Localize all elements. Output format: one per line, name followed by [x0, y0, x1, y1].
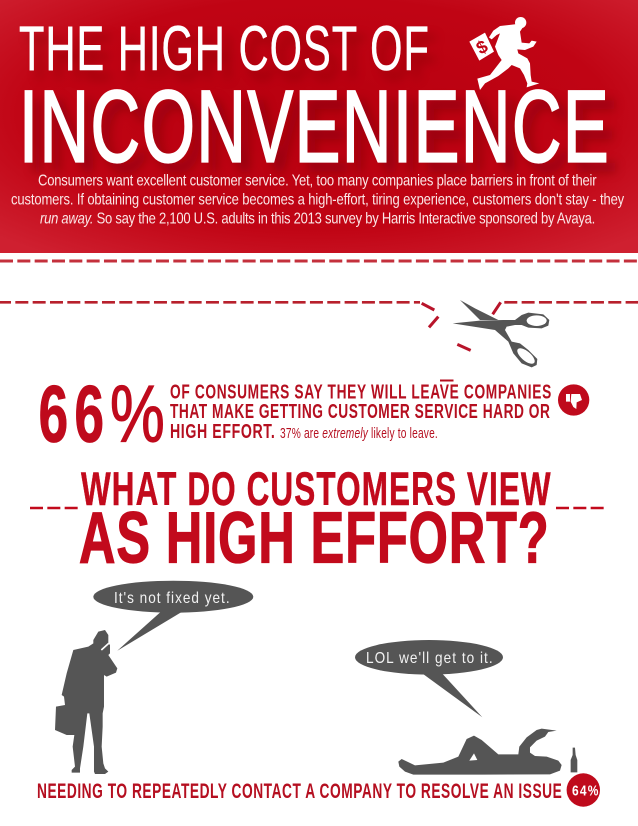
- title: inconvenience: INCONVENIENCE: [19, 70, 609, 184]
- badge: 64 percent: [567, 773, 600, 807]
- title shadow: [27, 24, 618, 193]
- callout: lol we'll get to it: [355, 640, 503, 717]
- stat: 66 percent: [38, 368, 165, 460]
- title shadow: THE HIGH COST OF: [27, 24, 437, 93]
- text block: intro: run away. So say the 2,100 U.S. adults in this 2013 survey by Harris Interactive sponsored by Avaya.: [40, 211, 595, 228]
- callout: it's not fixed yet: It's not fixed yet.: [114, 590, 230, 607]
- callout: lol we'll get to it: LOL we'll get to it.: [366, 650, 493, 667]
- heading: what do customers view as high effort: [79, 464, 551, 579]
- badge: 64 percent: 64%: [572, 782, 598, 799]
- text block: intro: [11, 173, 625, 228]
- caption: repeatedly contact: NEEDING TO REPEATEDLY CONTACT A COMPANY TO RESOLVE AN ISSUE: [37, 779, 562, 803]
- title: the high cost of: THE HIGH COST OF: [19, 15, 429, 84]
- text block: leave companies: OF CONSUMERS SAY THEY WILL LEAVE COMPANIES: [170, 380, 551, 403]
- icon: bottle: [571, 748, 577, 772]
- text block: leave companies: 37% are extremely likely to leave.: [280, 424, 438, 442]
- icon: running man with money case: $: [473, 36, 491, 58]
- icon: thumbs down badge: [558, 384, 589, 416]
- icon: running man with money case: [469, 17, 539, 90]
- icon: scissors cutting dashed line: [422, 300, 549, 367]
- text block: intro: Consumers want excellent customer service. Yet, too many companies place barriers in front of their: [38, 173, 597, 190]
- text block: leave companies: HIGH EFFORT.: [170, 419, 275, 443]
- icon: man lying down with phone: [398, 729, 562, 775]
- text block: leave companies: THAT MAKE GETTING CUSTOMER SERVICE HARD OR: [170, 399, 550, 423]
- panel: red header: [0, 0, 638, 253]
- text block: intro: customers. If obtaining customer service becomes a high-effort, tiring experience, customers don't stay - they: [11, 192, 625, 209]
- title shadow: INCONVENIENCE: [28, 79, 618, 193]
- heading: what do customers view as high effort: AS HIGH EFFORT?: [79, 499, 549, 579]
- stat: 66 percent: 66: [38, 368, 104, 459]
- stat: 66 percent: %: [110, 369, 165, 460]
- callout: it's not fixed yet: [93, 581, 253, 651]
- text block: leave companies: [170, 380, 551, 443]
- icon: man on phone with briefcase: [55, 630, 117, 774]
- heading: what do customers view as high effort: WHAT DO CUSTOMERS VIEW: [81, 464, 551, 516]
